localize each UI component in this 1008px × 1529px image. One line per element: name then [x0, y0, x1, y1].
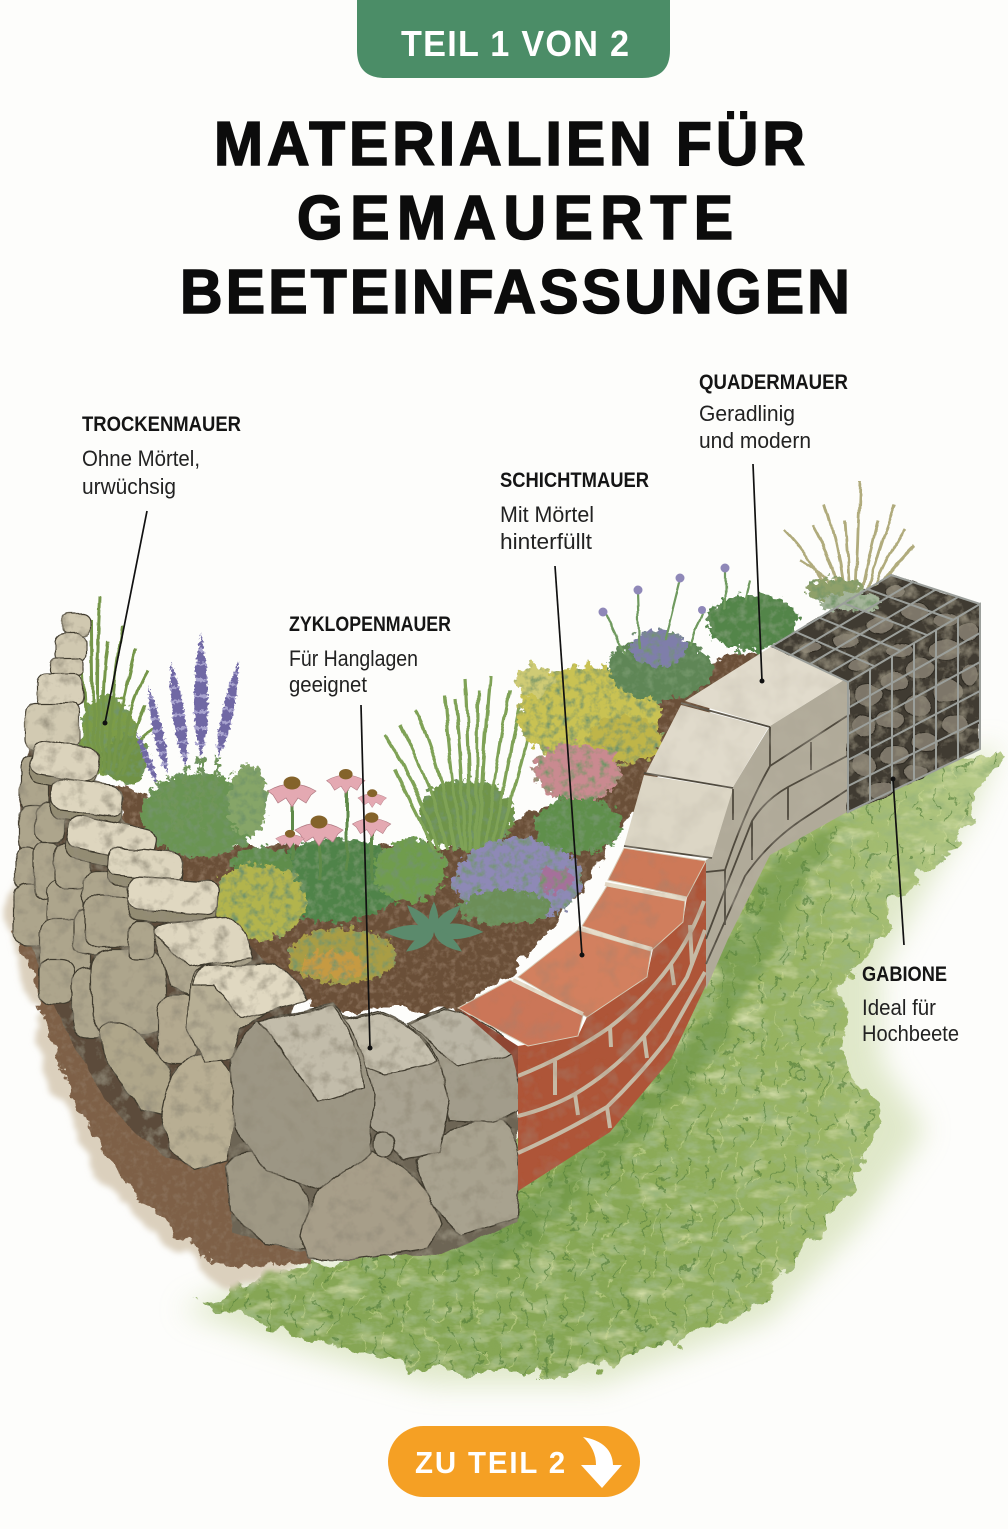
- label: Quadermauer: Geradlinig: [699, 401, 795, 426]
- header tab: part indicator: TEIL 1 VON 2: [401, 24, 629, 64]
- header tab: part indicator: [357, 0, 670, 78]
- label: Quadermauer: QUADERMAUER: [699, 371, 848, 394]
- label: Trockenmauer: urwüchsig: [82, 474, 176, 499]
- label: Gabione: Ideal für: [862, 995, 936, 1020]
- label: Gabione: Hochbeete: [862, 1021, 959, 1046]
- icon: curved down arrow: [581, 1437, 622, 1488]
- label: Zyklopenmauer: geeignet: [289, 672, 367, 697]
- brick mortar joints: [518, 901, 705, 1153]
- label: Schichtmauer: Mit Mörtel: [500, 502, 594, 527]
- title: BEETEINFASSUNGEN: [180, 257, 850, 326]
- label: Zyklopenmauer: Für Hanglagen: [289, 646, 418, 671]
- label: Trockenmauer: TROCKENMAUER: [82, 413, 241, 436]
- wall section: trockenmauer (dry stone wall): [15, 613, 306, 1169]
- label: Schichtmauer: hinterfüllt: [500, 529, 592, 554]
- plants: tall grass: [385, 675, 530, 851]
- wall section: quadermauer (ashlar wall): [624, 646, 847, 989]
- illustration: planting bed soil: [110, 650, 780, 1010]
- wall section: gabione (gabion): [772, 575, 980, 812]
- plants: purple flower bush and agave: [385, 838, 582, 956]
- label: Zyklopenmauer: ZYKLOPENMAUER: [289, 613, 451, 636]
- plants: grass clump behind dry wall: [74, 597, 160, 784]
- label: Schichtmauer: [500, 469, 649, 958]
- plants: echinacea: [232, 769, 446, 922]
- wall section: schichtmauer (brick wall): [458, 848, 706, 1191]
- label: Quadermauer: [699, 371, 848, 684]
- plants: yellow shrub and pink yarrow: [517, 664, 663, 853]
- label: Trockenmauer: [82, 413, 241, 726]
- title: GEMAUERTE: [297, 183, 733, 252]
- plants: purple perennial and green foliage: [598, 564, 798, 700]
- gabion wire mesh: [772, 575, 980, 812]
- gabion plants on top: [820, 593, 884, 611]
- plants: yellow-green shrub: [210, 864, 396, 984]
- plants: ornamental grass behind gabion: [785, 480, 915, 602]
- label: Schichtmauer: SCHICHTMAUER: [500, 469, 649, 492]
- label: Trockenmauer: Ohne Mörtel,: [82, 446, 200, 471]
- button: to part 2: [388, 1426, 640, 1497]
- label: Zyklopenmauer: [289, 613, 451, 1050]
- button: to part 2: ZU TEIL 2: [415, 1446, 565, 1480]
- title: [180, 109, 850, 326]
- label: Gabione: [862, 776, 959, 1046]
- plants: lavender: [133, 633, 268, 857]
- brick top face: [458, 848, 706, 1046]
- title: MATERIALIEN FÜR: [214, 109, 805, 178]
- label: Quadermauer: und modern: [699, 428, 811, 453]
- illustration: lawn: [180, 745, 1000, 1385]
- illustration: soil path left: [4, 860, 320, 1282]
- dry wall capstones: [25, 613, 306, 1062]
- label: Gabione: GABIONE: [862, 963, 947, 986]
- wall section: zyklopenmauer (cyclopean wall): [226, 1004, 519, 1260]
